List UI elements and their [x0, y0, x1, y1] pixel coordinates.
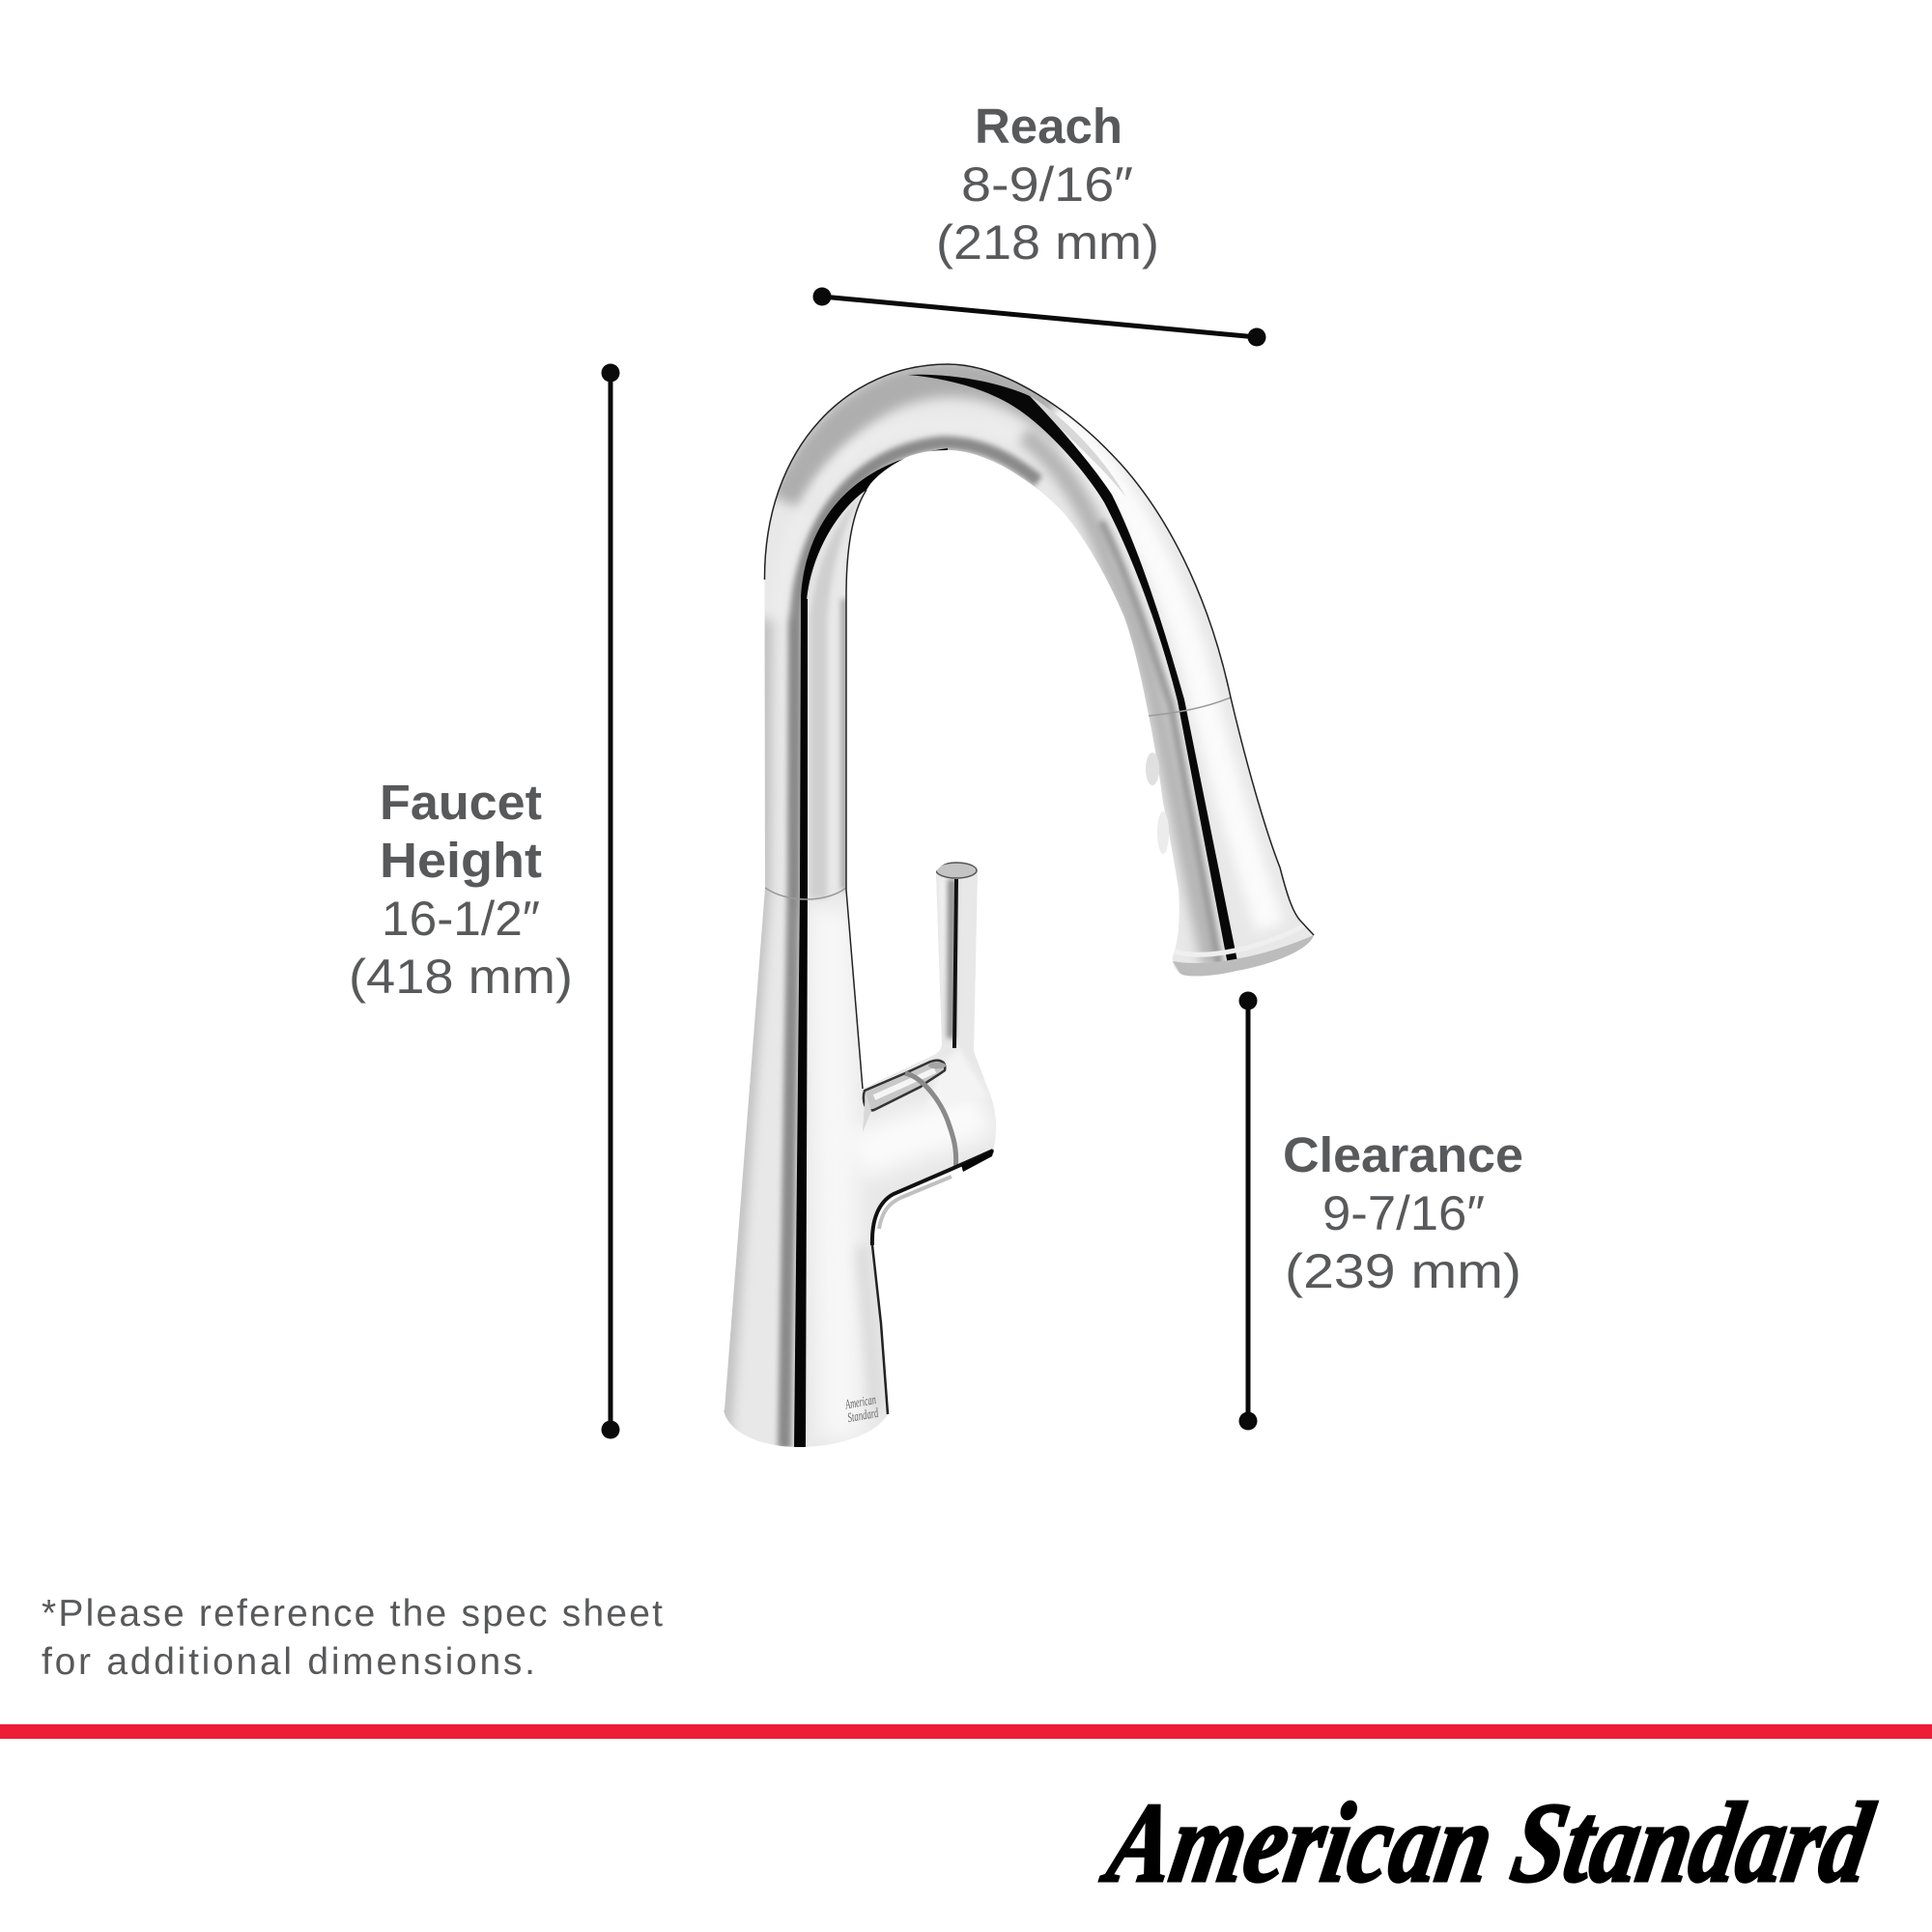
- label: faucet height: [349, 775, 573, 1004]
- label: faucet height: Height: [380, 833, 542, 888]
- label: faucet height: (418 mm): [349, 950, 573, 1004]
- label: reach: [936, 99, 1159, 270]
- handle lower dark edge: [872, 1151, 993, 1245]
- lever: [932, 865, 981, 1053]
- dimension: clearance line: [1238, 991, 1258, 1430]
- thin outlines: [764, 364, 1314, 1414]
- label: reach: 8-9/16″: [961, 157, 1133, 212]
- label: clearance: 9-7/16″: [1322, 1186, 1485, 1240]
- joint lines: [765, 888, 846, 899]
- faucet logo mark: [843, 1393, 880, 1426]
- sprayer buttons: [1146, 753, 1159, 785]
- footnote: [42, 1593, 663, 1683]
- wedge and neck reflection: [808, 504, 856, 900]
- label: reach: (218 mm): [936, 215, 1159, 270]
- dark stripe: body: [794, 599, 808, 1449]
- faucet illustration: [715, 357, 1323, 1459]
- dark stripe: inner arc: [801, 448, 948, 601]
- faucet logo mark: American: [843, 1393, 877, 1413]
- dark stripe: outer arc: [908, 375, 1238, 970]
- footnote: *Please reference the spec sheet: [42, 1593, 663, 1634]
- spout bottom rim: [1173, 935, 1314, 978]
- label: clearance: Clearance: [1283, 1127, 1523, 1182]
- handle arm slot: [864, 1061, 945, 1110]
- red divider bar: [0, 1724, 1932, 1739]
- lever top: [936, 863, 977, 878]
- label: clearance: [1283, 1127, 1523, 1298]
- handle ring: [905, 1073, 956, 1178]
- footnote: for additional dimensions.: [42, 1641, 535, 1683]
- label: reach: Reach: [975, 99, 1122, 154]
- label: faucet height: Faucet: [380, 775, 542, 830]
- shading: [723, 379, 1270, 1449]
- label: faucet height: 16-1/2″: [382, 892, 540, 946]
- dimension: reach line: [813, 288, 1265, 346]
- label: clearance: (239 mm): [1285, 1244, 1521, 1298]
- dimension: faucet height line: [601, 363, 620, 1439]
- faucet logo mark: Standard: [846, 1406, 880, 1426]
